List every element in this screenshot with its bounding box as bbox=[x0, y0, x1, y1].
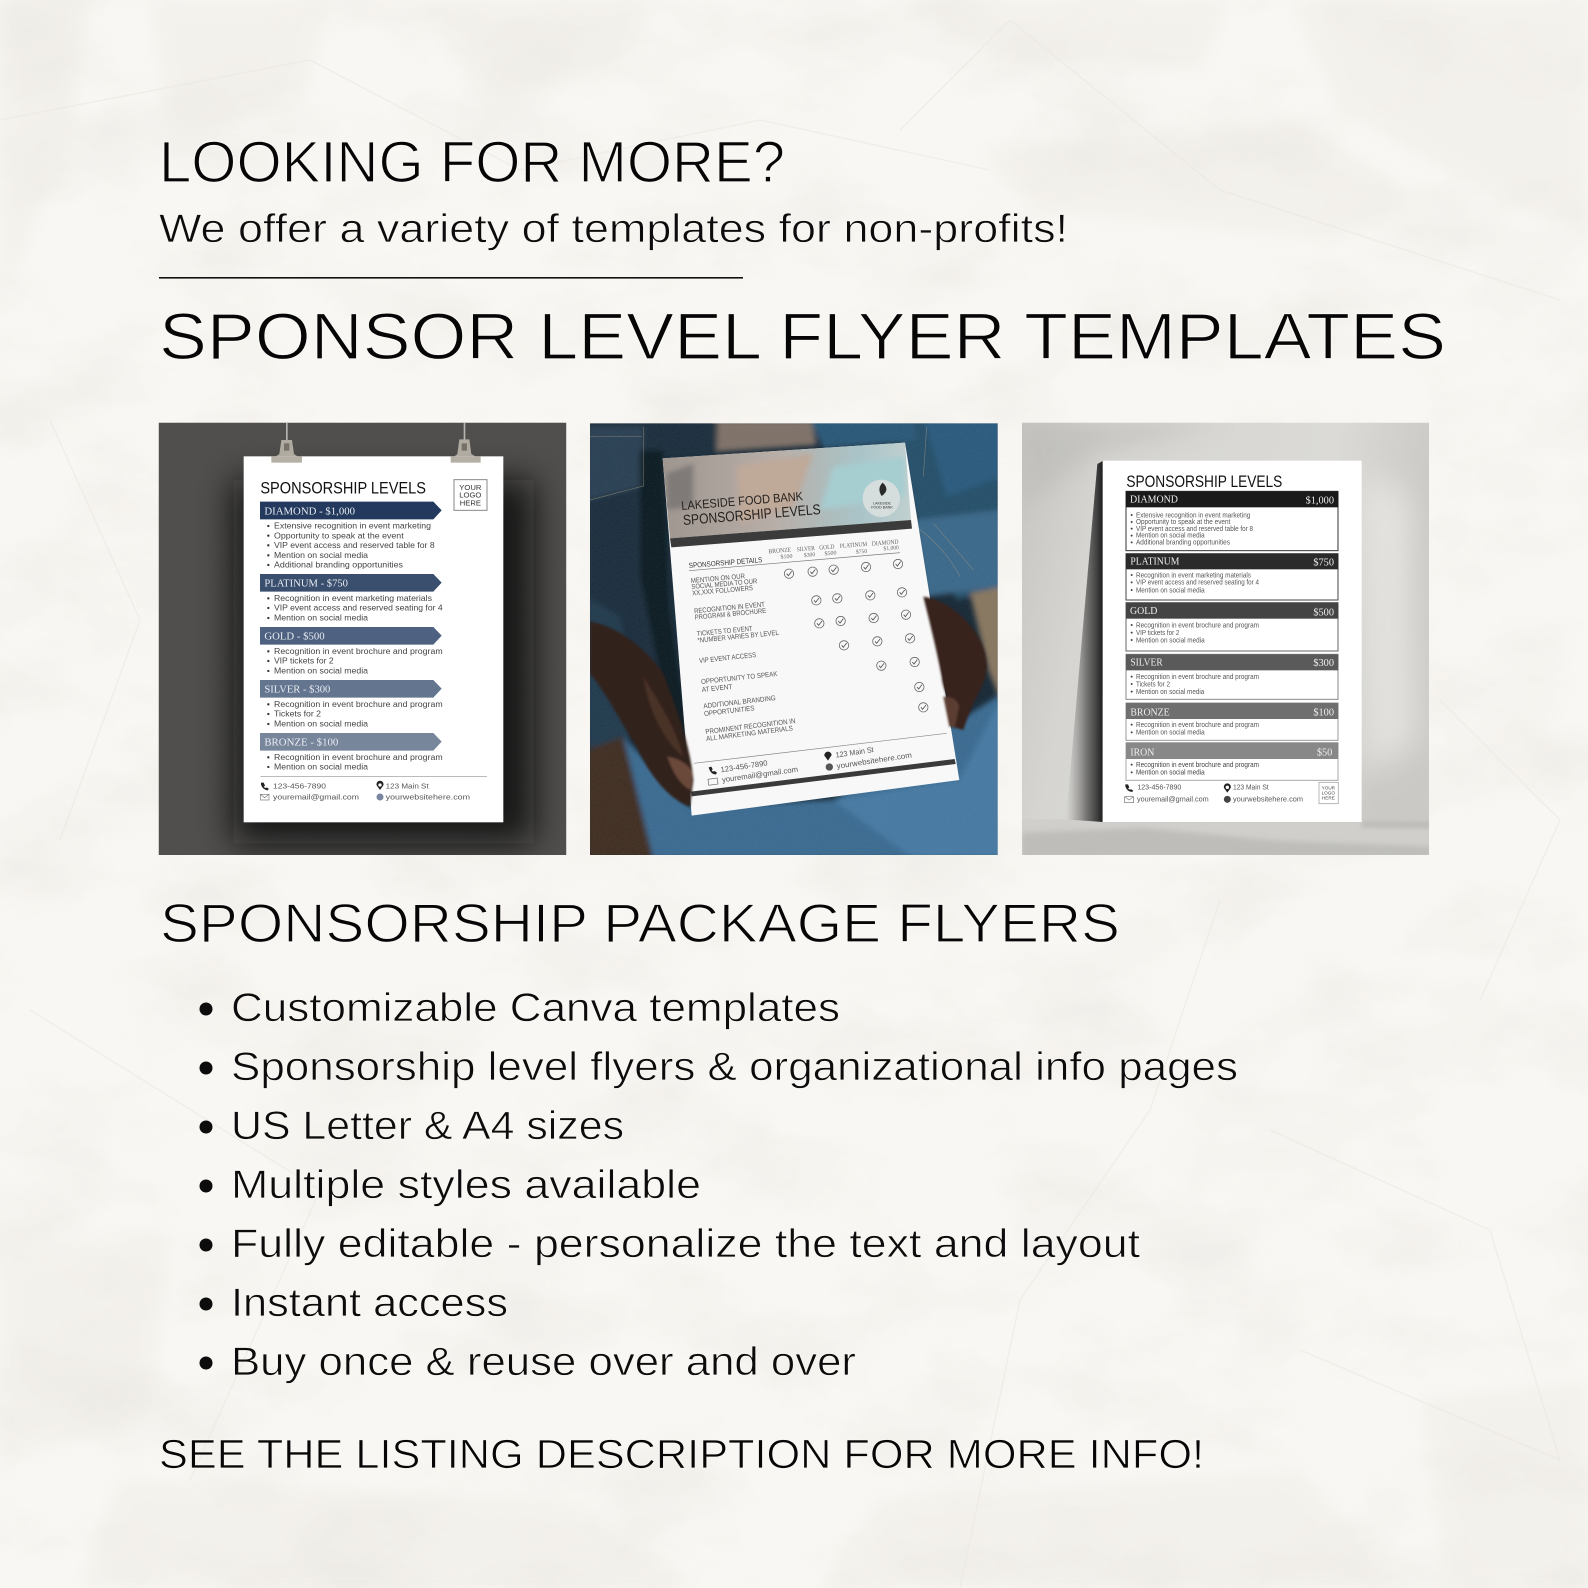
row labels: PROGRAM & BROCHURE bbox=[695, 608, 767, 622]
tier: iron: IRON bbox=[1130, 747, 1155, 758]
tier: diamond: VIP event access and reserved table for 8 bbox=[1136, 526, 1253, 533]
bullet list: features: Multiple styles available bbox=[231, 1163, 701, 1207]
closing call to action: SEE THE LISTING DESCRIPTION FOR MORE INFO! bbox=[159, 1431, 1204, 1477]
tier: diamond: Extensive recognition in event marketing bbox=[274, 521, 431, 531]
heading: sponsor level flyer templates: SPONSOR LEVEL FLYER TEMPLATES bbox=[159, 299, 1446, 373]
bullet list: features: Fully editable - personalize the text and layout bbox=[231, 1222, 1140, 1266]
tier: gold: $500 bbox=[1313, 607, 1334, 618]
bullet list: features bbox=[200, 986, 1238, 1384]
contact footer bbox=[260, 776, 487, 802]
comparison table header: $500 bbox=[824, 549, 837, 557]
photo header band bbox=[663, 443, 912, 547]
tier: silver bbox=[260, 680, 443, 729]
tier: gold: GOLD bbox=[1130, 606, 1158, 617]
flyer title: SPONSORSHIP LEVELS bbox=[260, 479, 426, 497]
tier: gold: Recognition in event brochure and program bbox=[1136, 622, 1259, 629]
tier: platinum bbox=[260, 574, 443, 623]
panel: greyscale table flyer leaning on wall bbox=[1022, 423, 1432, 858]
tier: bronze: BRONZE - $100 bbox=[264, 738, 338, 749]
row labels: OPPORTUNITIES bbox=[704, 705, 755, 718]
tier: gold: VIP tickets for 2 bbox=[1136, 630, 1179, 637]
tier: platinum: Recognition in event marketing materials bbox=[274, 593, 432, 603]
comparison table header bbox=[688, 539, 900, 571]
comparison table header: $100 bbox=[780, 553, 793, 561]
panel: comparison flyer held by person in denim bbox=[587, 420, 1002, 858]
tier: platinum: PLATINUM bbox=[1130, 556, 1179, 567]
contact footer and logo bbox=[1125, 782, 1338, 804]
contact footer: 123-456-7890 bbox=[273, 781, 326, 790]
tier: diamond: $1,000 bbox=[1306, 495, 1334, 506]
check marks bbox=[784, 559, 928, 712]
tier: silver: SILVER bbox=[1130, 658, 1163, 669]
tier: diamond: DIAMOND bbox=[1130, 495, 1179, 506]
photo header band: FOOD BANK bbox=[871, 506, 893, 510]
tier: silver: $300 bbox=[1313, 658, 1334, 669]
tier: platinum: VIP event access and reserved seating for 4 bbox=[274, 603, 443, 613]
logo placeholder: YOUR bbox=[459, 483, 482, 492]
flyer footer bbox=[691, 733, 956, 796]
tier: diamond: Mention on social media bbox=[274, 550, 368, 560]
bullet list: features: Sponsorship level flyers & organizational info pages bbox=[231, 1045, 1238, 1089]
tier: bronze: BRONZE bbox=[1130, 707, 1170, 718]
row labels: AT EVENT bbox=[701, 684, 733, 694]
tier: bronze bbox=[1126, 703, 1338, 740]
tier: platinum: PLATINUM - $750 bbox=[264, 579, 348, 590]
photo header band: LAKESIDE FOOD BANK bbox=[681, 489, 804, 513]
tier: silver bbox=[1126, 654, 1338, 699]
tier: silver: Recognition in event brochure and program bbox=[1136, 674, 1259, 681]
photo header band: SPONSORSHIP LEVELS bbox=[682, 502, 821, 529]
row labels: XX,XXX FOLLOWERS bbox=[692, 585, 754, 597]
comparison table header: DIAMOND bbox=[872, 539, 899, 548]
hands holding the flyer bbox=[590, 597, 987, 807]
heading: sponsorship package flyers: SPONSORSHIP PACKAGE FLYERS bbox=[160, 892, 1120, 954]
tier: silver: Tickets for 2 bbox=[1136, 681, 1170, 688]
flyer footer: 123 Main St bbox=[835, 745, 875, 760]
row labels: VIP EVENT ACCESS bbox=[699, 652, 757, 665]
flyer sheet bbox=[244, 456, 503, 822]
row labels: ALL MARKETING MATERIALS bbox=[706, 725, 794, 743]
flyer footer: 123-456-7890 bbox=[720, 758, 768, 774]
tier: diamond: Mention on social media bbox=[1136, 533, 1205, 540]
tier: platinum: Recognition in event marketing materials bbox=[1136, 572, 1251, 579]
contact footer and logo: yourwebsitehere.com bbox=[1233, 795, 1303, 804]
row labels: SOCIAL MEDIA TO OUR bbox=[691, 578, 758, 591]
comparison table header: GOLD bbox=[819, 543, 835, 552]
logo placeholder: HERE bbox=[460, 499, 481, 508]
row labels bbox=[691, 573, 796, 743]
panel: navy arrow flyer mockup on dark wall bbox=[159, 423, 566, 855]
tier: bronze bbox=[260, 733, 443, 772]
tier: silver: Mention on social media bbox=[1136, 689, 1204, 696]
tier: diamond: VIP event access and reserved table for 8 bbox=[274, 540, 435, 550]
tier: iron: $50 bbox=[1317, 747, 1332, 758]
comparison table header: $300 bbox=[804, 551, 816, 559]
row labels: RECOGNITION IN EVENT bbox=[694, 601, 766, 615]
contact footer and logo: youremail@gmail.com bbox=[1137, 795, 1209, 804]
contact footer and logo: HERE bbox=[1322, 795, 1335, 800]
tier: silver: Mention on social media bbox=[274, 719, 368, 729]
divider rule bbox=[159, 277, 743, 279]
contact footer: yourwebsitehere.com bbox=[386, 793, 470, 802]
subheading: variety of templates: We offer a variety of templates for non-profits! bbox=[159, 207, 1068, 251]
tier: diamond: Additional branding opportunities bbox=[1136, 540, 1230, 547]
contact footer and logo: 123-456-7890 bbox=[1137, 783, 1181, 792]
tier: silver: Recognition in event brochure and program bbox=[274, 699, 443, 709]
tier: diamond: DIAMOND - $1,000 bbox=[264, 506, 355, 517]
bullet list: features: Buy once & reuse over and over bbox=[231, 1340, 856, 1384]
contact footer and logo: LOGO bbox=[1322, 790, 1335, 795]
logo placeholder bbox=[454, 480, 487, 510]
tier: bronze: Recognition in event brochure and program bbox=[1136, 722, 1259, 729]
tier: platinum: Mention on social media bbox=[1136, 587, 1205, 594]
tier: gold: GOLD - $500 bbox=[264, 632, 325, 643]
tier: gold: Mention on social media bbox=[1136, 637, 1205, 644]
flyer shadow bbox=[1066, 461, 1103, 822]
tier: iron: Recognition in event brochure and program bbox=[1136, 762, 1259, 769]
tier: diamond: Additional branding opportunities bbox=[274, 560, 403, 570]
row labels: ADDITIONAL BRANDING bbox=[703, 695, 776, 710]
comparison table header: $1,000 bbox=[883, 544, 899, 552]
tier: platinum: Mention on social media bbox=[274, 613, 368, 623]
tier: diamond bbox=[1126, 491, 1338, 551]
tier: gold bbox=[260, 627, 443, 676]
studio wall and floor bbox=[1022, 423, 1432, 858]
tier: iron: Mention on social media bbox=[1136, 770, 1205, 777]
tier: bronze: Mention on social media bbox=[1136, 730, 1205, 737]
tier: iron bbox=[1126, 743, 1338, 780]
tier: diamond: Opportunity to speak at the event bbox=[1136, 519, 1230, 526]
tier: gold: Mention on social media bbox=[274, 666, 368, 676]
flyer footer: yourwebsitehere.com bbox=[836, 751, 912, 771]
tier: gold: VIP tickets for 2 bbox=[274, 656, 334, 666]
tier: bronze: Recognition in event brochure and program bbox=[274, 752, 443, 762]
bullet list: features: US Letter & A4 sizes bbox=[231, 1104, 624, 1148]
row labels: MENTION ON OUR bbox=[691, 573, 745, 585]
flyer footer: youremail@gmail.com bbox=[721, 765, 799, 784]
denim jacket and jeans photo background bbox=[587, 420, 1002, 858]
bullet list: features: Instant access bbox=[231, 1281, 508, 1325]
row labels: PROMINENT RECOGNITION IN bbox=[705, 718, 796, 736]
flyer sheet, tilted bbox=[663, 443, 959, 816]
wall background bbox=[159, 423, 566, 855]
tier: gold bbox=[1126, 603, 1338, 651]
comparison table header: SILVER bbox=[797, 545, 816, 553]
comparison table header: SPONSORSHIP DETAILS bbox=[688, 555, 763, 570]
tier: diamond: Extensive recognition in event marketing bbox=[1136, 512, 1250, 519]
row labels: *NUMBER VARIES BY LEVEL bbox=[697, 630, 779, 645]
contact footer: 123 Main St bbox=[386, 781, 429, 790]
tier: silver: SILVER - $300 bbox=[264, 685, 330, 696]
comparison table header: PLATINUM bbox=[840, 541, 868, 550]
contact footer and logo: YOUR bbox=[1322, 785, 1336, 790]
contact footer and logo: 123 Main St bbox=[1233, 783, 1269, 792]
row labels: TICKETS TO EVENT bbox=[697, 626, 754, 638]
tier: platinum: VIP event access and reserved seating for 4 bbox=[1136, 580, 1259, 587]
photo header band: LAKESIDE bbox=[873, 502, 891, 506]
row labels: OPPORTUNITY TO SPEAK bbox=[701, 671, 778, 686]
tier: bronze: Mention on social media bbox=[274, 762, 368, 772]
tier: bronze: $100 bbox=[1313, 707, 1334, 718]
contact footer: youremail@gmail.com bbox=[273, 793, 359, 802]
comparison table header: $750 bbox=[856, 548, 868, 556]
bullet list: features: Customizable Canva templates bbox=[231, 986, 840, 1030]
binder clips bbox=[276, 422, 476, 456]
flyer sheet bbox=[1103, 461, 1362, 822]
tier: platinum bbox=[1126, 554, 1338, 600]
flyer title: SPONSORSHIP LEVELS bbox=[1126, 472, 1282, 491]
tier: diamond: Opportunity to speak at the event bbox=[274, 530, 404, 540]
heading: looking for more: LOOKING FOR MORE? bbox=[159, 130, 785, 195]
comparison table header: BRONZE bbox=[768, 547, 792, 555]
tier: gold: Recognition in event brochure and program bbox=[274, 646, 443, 656]
tier: diamond bbox=[260, 502, 442, 570]
logo placeholder: LOGO bbox=[459, 491, 481, 500]
tier: silver: Tickets for 2 bbox=[274, 709, 321, 719]
tier: platinum: $750 bbox=[1313, 557, 1334, 568]
